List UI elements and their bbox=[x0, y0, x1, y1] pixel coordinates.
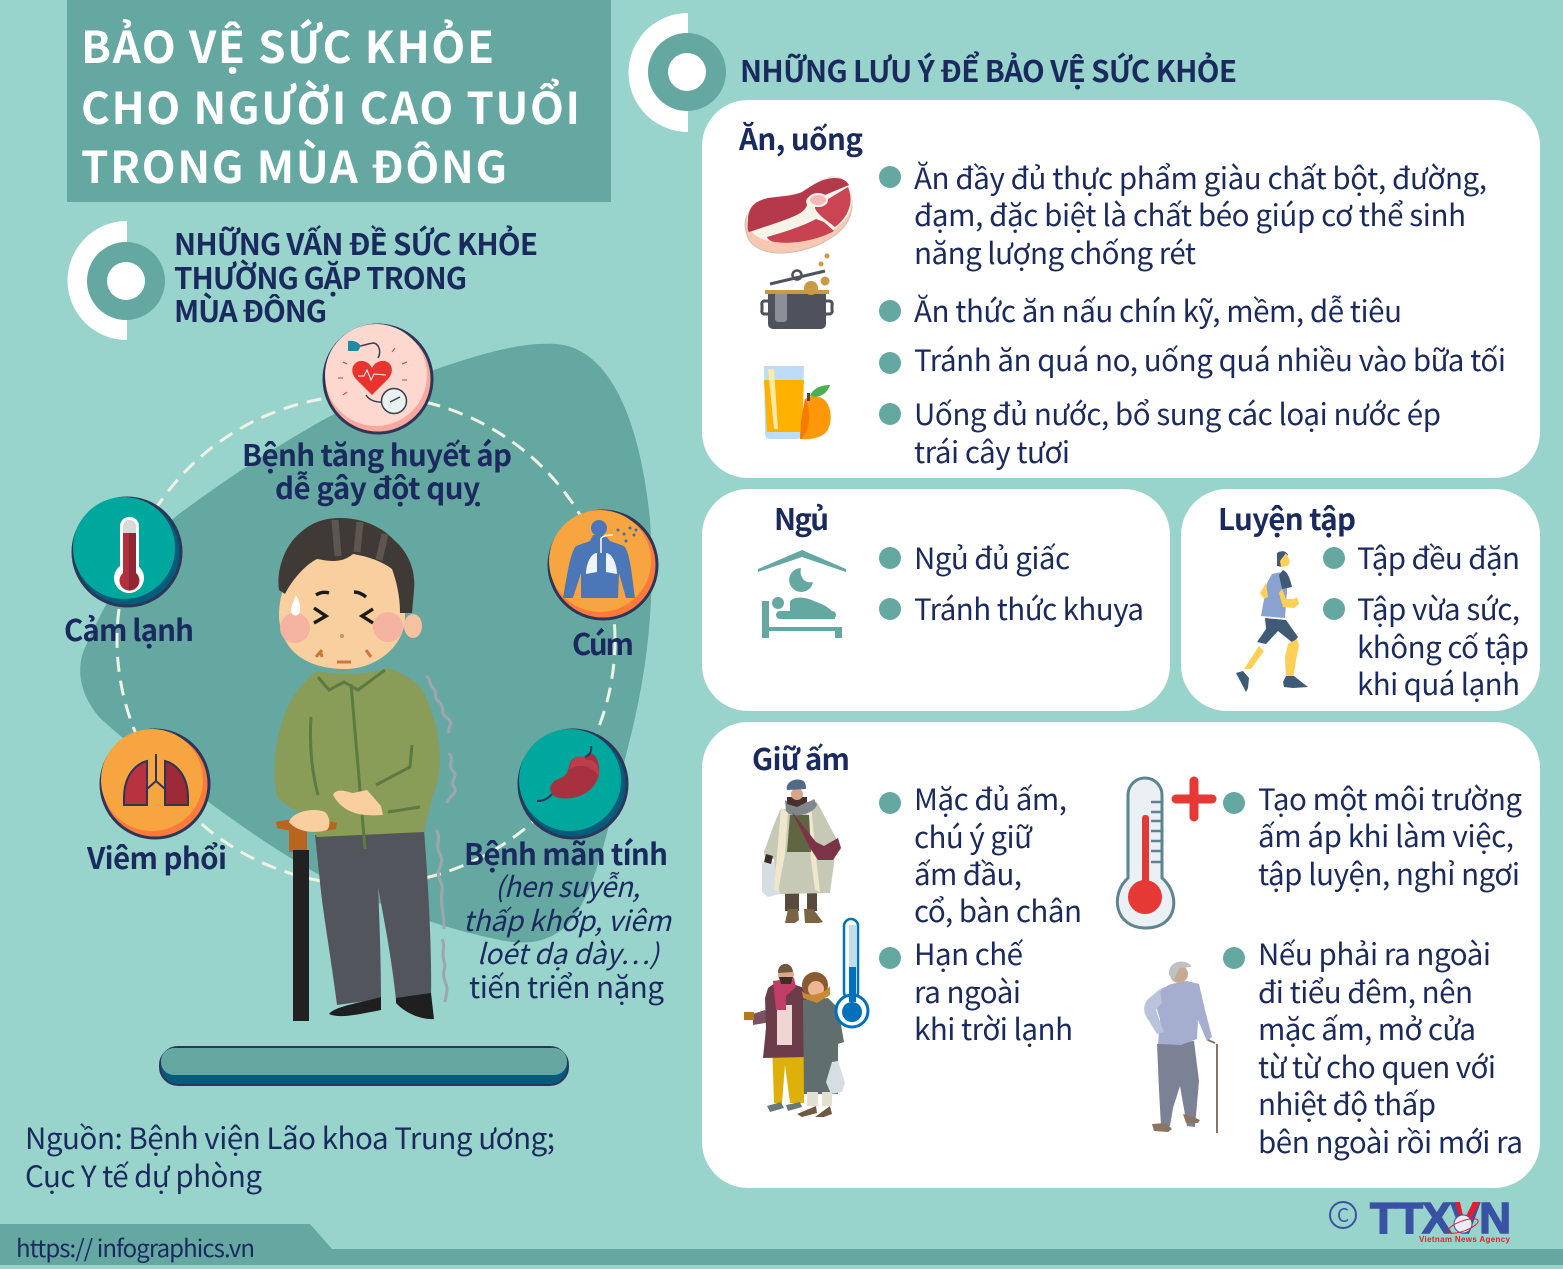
icon: sleeping in bed bbox=[758, 550, 846, 638]
shaking lines bbox=[426, 676, 455, 1002]
icon: cooking pot bbox=[762, 254, 832, 329]
eyes bbox=[314, 592, 373, 623]
text: warm environment: ấm áp khi làm việc, bbox=[1258, 814, 1514, 856]
icon: flu bbox=[549, 510, 657, 619]
text: eating advice: trái cây tươi bbox=[914, 430, 1070, 472]
heading: eating: Ăn, uống bbox=[738, 117, 863, 159]
chronic illness label: Bệnh mãn tính bbox=[464, 832, 668, 874]
label: cold: Cảm lạnh bbox=[64, 608, 194, 650]
hair bbox=[278, 518, 414, 613]
label: hypertension: dễ gây đột quỵ bbox=[275, 466, 480, 508]
text: going out at night: nhiệt độ thấp bbox=[1258, 1082, 1436, 1124]
heading: keep warm: Giữ ấm bbox=[752, 737, 850, 779]
text: exercise advice: không cố tập bbox=[1357, 625, 1529, 667]
icon: right section ring bbox=[628, 13, 726, 132]
text: limit going out: ra ngoài bbox=[914, 970, 1021, 1012]
label: pneumonia: Viêm phổi bbox=[86, 836, 227, 878]
icon: chronic illness stomach bbox=[519, 729, 627, 838]
text: going out at night bbox=[1258, 932, 1523, 1162]
text: sleep advice: Tránh thức khuya bbox=[914, 587, 1144, 629]
dashed ring bbox=[117, 395, 615, 885]
heading: common winter health problems bbox=[174, 222, 538, 331]
thermometer: blue bbox=[836, 919, 868, 1027]
heading: health notes: NHỮNG LƯU Ý ĐỂ BẢO VỆ SỨC KHỎE bbox=[740, 49, 1237, 91]
text: exercise advice bbox=[1357, 536, 1529, 704]
text: warm environment: Tạo một môi trường bbox=[1258, 777, 1522, 819]
text: limit going out: Hạn chế bbox=[914, 932, 1024, 974]
label: flu: Cúm bbox=[572, 622, 634, 664]
text: eating advice: đạm, đặc biệt là chất béo giúp cơ thể sinh bbox=[914, 193, 1466, 235]
chronic illness label: tiến triển nặng bbox=[469, 965, 664, 1007]
logo: TTXVN: Vietnam News Agency bbox=[1419, 1235, 1511, 1244]
text: warm environment bbox=[1258, 777, 1522, 894]
jacket bbox=[274, 668, 440, 837]
bullets: sleep bbox=[879, 547, 901, 620]
website: https:// infographics.vn bbox=[16, 1229, 255, 1264]
face bbox=[279, 542, 405, 669]
text: going out at night: Nếu phải ra ngoài bbox=[1258, 932, 1491, 974]
label: hypertension: Bệnh tăng huyết áp bbox=[242, 433, 512, 475]
panel: exercise bbox=[1181, 489, 1540, 711]
heading: common winter health problems: MÙA ĐÔNG bbox=[174, 289, 327, 331]
heading: common winter health problems: NHỮNG VẤN ĐỀ SỨC KHỎE bbox=[174, 222, 538, 264]
heading: common winter health problems: THƯỜNG GẶP TRONG bbox=[174, 256, 467, 298]
trousers bbox=[315, 830, 431, 1005]
sweat bbox=[291, 595, 300, 616]
text: going out at night: mặc ấm, mở cửa bbox=[1258, 1007, 1476, 1049]
title: CHO NGƯỜI CAO TUỔI bbox=[81, 73, 580, 137]
source: Cục Y tế dự phòng bbox=[25, 1154, 262, 1196]
text: warm environment: tập luyện, nghỉ ngơi bbox=[1258, 852, 1520, 894]
text: sleep advice: Ngủ đủ giấc bbox=[914, 536, 1070, 578]
icon: pneumonia lungs bbox=[101, 729, 209, 838]
panel: eating and drinking bbox=[702, 100, 1540, 478]
text: going out at night: bên ngoài rồi mới ra bbox=[1258, 1120, 1523, 1162]
chronic illness label: loét dạ dày…) bbox=[477, 933, 661, 973]
icon: man in winter coat bbox=[762, 779, 841, 923]
text: dress warmly: Mặc đủ ấm, bbox=[914, 777, 1067, 819]
bullets: exercise bbox=[1323, 547, 1345, 620]
bullets: eating bbox=[879, 166, 901, 425]
icon: juice and orange bbox=[764, 366, 831, 439]
panel: sleep bbox=[702, 489, 1170, 711]
mouth and wrinkles bbox=[316, 650, 371, 662]
icon: couple in winter clothes bbox=[744, 919, 868, 1117]
icon: hypertension bbox=[324, 324, 432, 433]
text: eating advice: Uống đủ nước, bổ sung các loại nước ép bbox=[914, 392, 1441, 434]
label: hypertension bbox=[242, 433, 512, 508]
text: going out at night: từ từ cho quen với bbox=[1258, 1045, 1496, 1087]
heading: sleep: Ngủ bbox=[774, 497, 829, 539]
text: limit going out: khi trời lạnh bbox=[914, 1007, 1073, 1049]
illustration: elderly man with cane bbox=[274, 518, 455, 1021]
text: dress warmly bbox=[914, 777, 1082, 931]
text: eating advice: năng lượng chống rét bbox=[914, 231, 1196, 273]
text: dress warmly: cổ, bàn chân bbox=[914, 889, 1082, 931]
chronic illness label bbox=[463, 832, 672, 1007]
logo: TTXVN: TTXVN bbox=[1370, 1194, 1511, 1243]
footer bar bbox=[0, 1224, 1563, 1265]
cane bbox=[289, 828, 307, 852]
text: limit going out bbox=[914, 932, 1073, 1049]
icon: runner bbox=[1236, 551, 1308, 692]
text: dress warmly: chú ý giữ bbox=[914, 815, 1033, 857]
text: exercise advice: Tập vừa sức, bbox=[1357, 587, 1520, 629]
text: exercise advice: Tập đều đặn bbox=[1357, 536, 1520, 578]
chronic illness label: thấp khớp, viêm bbox=[463, 900, 672, 940]
source bbox=[25, 1116, 555, 1196]
icon: left section ring bbox=[68, 221, 165, 340]
ear bbox=[404, 614, 422, 638]
text: going out at night: đi tiểu đêm, nên bbox=[1258, 970, 1473, 1012]
panel: keep warm bbox=[702, 722, 1540, 1188]
text: exercise advice: khi quá lạnh bbox=[1357, 662, 1520, 704]
text: eating advice: Tránh ăn quá no, uống quá nhiều vào bữa tối bbox=[914, 338, 1506, 380]
icon: elderly man with walking stick bbox=[1144, 962, 1218, 1133]
shoes bbox=[329, 993, 434, 1019]
source: Nguồn: Bệnh viện Lão khoa Trung ương; bbox=[25, 1116, 555, 1158]
pedestal bar bbox=[160, 1047, 568, 1085]
chronic illness label: (hen suyễn, bbox=[495, 866, 640, 906]
hands bbox=[289, 790, 383, 832]
background blob bbox=[80, 344, 652, 942]
text: dress warmly: ấm đầu, bbox=[914, 852, 1022, 894]
bullets: keep warm bbox=[879, 792, 1245, 969]
icon: cold thermometer bbox=[73, 497, 181, 606]
text: eating advice: Ăn thức ăn nấu chín kỹ, mềm, dễ tiêu bbox=[914, 289, 1402, 331]
text: sleep advice bbox=[914, 536, 1144, 629]
heading: exercise: Luyện tập bbox=[1218, 497, 1356, 539]
title: BẢO VỆ SỨC KHỎE bbox=[81, 12, 494, 76]
logo: TTXVN: C bbox=[1337, 1201, 1349, 1228]
icon: meat bbox=[745, 177, 852, 253]
title: TRONG MÙA ĐÔNG bbox=[81, 132, 507, 196]
text: eating advice: Ăn đầy đủ thực phẩm giàu chất bột, đường, bbox=[914, 156, 1487, 198]
title bbox=[67, 0, 611, 202]
text: eating advice bbox=[914, 156, 1506, 472]
icon: red thermometer and plus bbox=[1117, 778, 1212, 928]
